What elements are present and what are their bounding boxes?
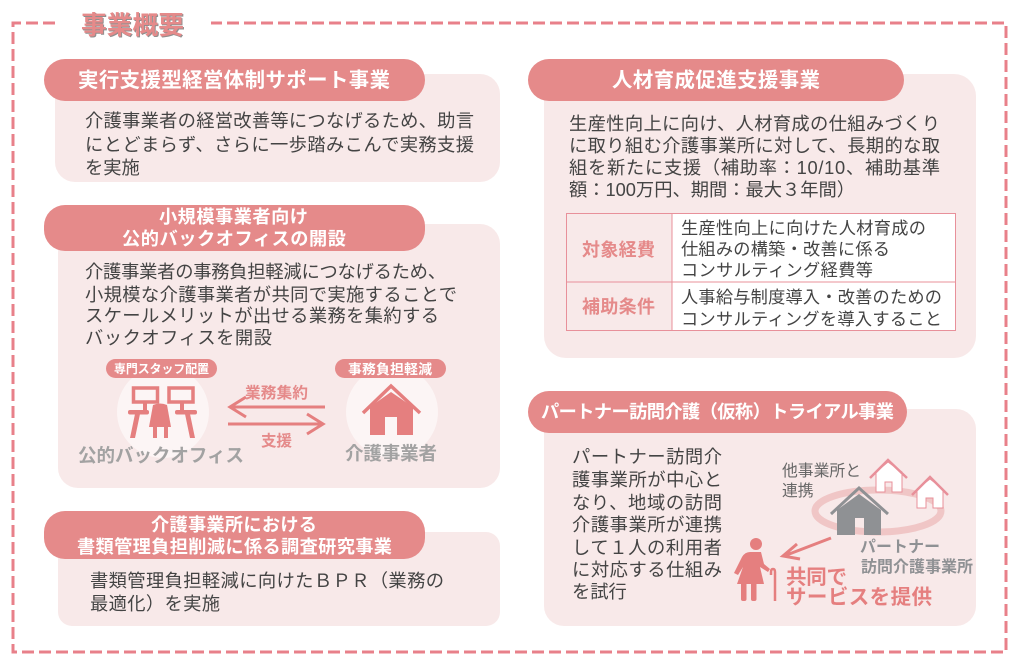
arrow: work consolidation (230, 384, 325, 417)
panel: public back office (44, 205, 500, 488)
arrow: support (228, 414, 323, 450)
label: public back office: 公的バックオフィス (78, 445, 244, 466)
badge: reduced burden: 事務負担軽減 (348, 361, 432, 377)
text: human resources body: 額：100万円、期間：最大３年間） (569, 179, 855, 200)
text: partner home care body: を試行 (572, 581, 627, 602)
illustration: partner network (734, 460, 973, 609)
text: partner home care body: 介護事業所が連携 (572, 514, 722, 535)
heading: execution support (44, 59, 425, 101)
arrow: service to user (783, 538, 831, 559)
badge: specialist staff: 専門スタッフ配置 (114, 362, 209, 376)
label: other offices: 連携 (782, 482, 814, 500)
table: costs and conditions: コンサルティングを導入すること (681, 309, 942, 329)
text: execution support body: にとどまらず、さらに一歩踏みこんで実務支援 (85, 134, 474, 155)
table: costs and conditions: コンサルティング経費等 (681, 260, 873, 280)
text: back office body: 介護事業者の事務負担軽減につなげるため、 (85, 261, 446, 282)
icon: office desks (117, 366, 209, 458)
label: partner office: 訪問介護事業所 (861, 557, 973, 576)
label: joint service: 共同で (786, 566, 847, 589)
text: execution support body: 介護事業者の経営改善等につなげるため、助言 (85, 110, 474, 131)
heading: public back office (44, 205, 425, 251)
table: costs and conditions (566, 213, 956, 330)
text: human resources body: 組を新たに支援（補助率：10/10、補助基準 (569, 157, 940, 178)
text: partner home care body: なり、地域の訪問 (572, 492, 722, 513)
panel: document burden research (44, 511, 500, 626)
heading: human resources (528, 59, 904, 101)
arrow: support: 支援 (261, 432, 292, 450)
heading: partner home care: パートナー訪問介護（仮称）トライアル事業 (541, 402, 894, 422)
label: joint service: サービスを提供 (786, 586, 932, 609)
text: partner home care body: して１人の利用者 (572, 537, 722, 558)
text: back office body: 小規模な介護事業者が共同で実施することで (85, 284, 457, 305)
title: 事業概要 (81, 11, 184, 40)
heading: public back office: 公的バックオフィスの開設 (122, 229, 346, 249)
text: document burden body: 最適化）を実施 (90, 593, 220, 614)
heading: document burden research (44, 511, 425, 559)
icon: partner house (831, 488, 888, 535)
panel: partner home care (528, 391, 976, 626)
label: partner office: パートナー (860, 538, 940, 556)
panel: human resources (528, 59, 976, 358)
text: back office body: バックオフィスを開設 (85, 327, 272, 348)
label: other offices: 他事業所と (782, 462, 861, 480)
arrow: work consolidation: 業務集約 (245, 384, 308, 402)
heading: document burden research: 介護事業所における (151, 515, 317, 535)
heading: partner home care (528, 391, 907, 433)
badge: specialist staff (106, 359, 217, 378)
heading: human resources: 人材育成促進支援事業 (612, 68, 820, 92)
heading: execution support: 実行支援型経営体制サポート事業 (78, 69, 390, 92)
heading: document burden research: 書類管理負担削減に係る調査研究事業 (77, 536, 392, 557)
icon: care business house (346, 366, 438, 458)
panel: execution support (44, 59, 500, 182)
icon: small house two (912, 477, 948, 508)
text: human resources body: 生産性向上に向け、人材育成の仕組みづくり (569, 113, 940, 134)
text: partner home care body: パートナー訪問介 (572, 446, 722, 467)
text: partner home care body: 護事業所が中心と (572, 469, 722, 490)
title: 事業概要 (82, 12, 185, 41)
table: costs and conditions: 仕組みの構築・改善に係る (681, 239, 890, 259)
table: costs and conditions: 対象経費 (582, 240, 655, 260)
table: costs and conditions: 人事給与制度導入・改善のための (681, 287, 942, 307)
label: care business: 介護事業者 (345, 443, 437, 464)
ring: collaboration (815, 490, 941, 532)
table: costs and conditions: 補助条件 (582, 297, 655, 317)
text: document burden body: 書類管理負担軽減に向けたＢＰＲ（業務の (90, 570, 444, 591)
icon: small house one (870, 460, 907, 492)
text: partner home care body: に対応する仕組み (572, 559, 722, 580)
icon: elderly person with cane (734, 538, 775, 601)
heading: public back office: 小規模事業者向け (159, 207, 308, 227)
text: back office body: スケールメリットが出せる業務を集約する (85, 305, 439, 326)
text: human resources body: に取り組む介護事業所に対して、長期的な取 (569, 135, 940, 156)
table: costs and conditions: 生産性向上に向けた人材育成の (681, 218, 926, 238)
badge: reduced burden (335, 359, 446, 378)
text: execution support body: を実施 (85, 157, 140, 178)
